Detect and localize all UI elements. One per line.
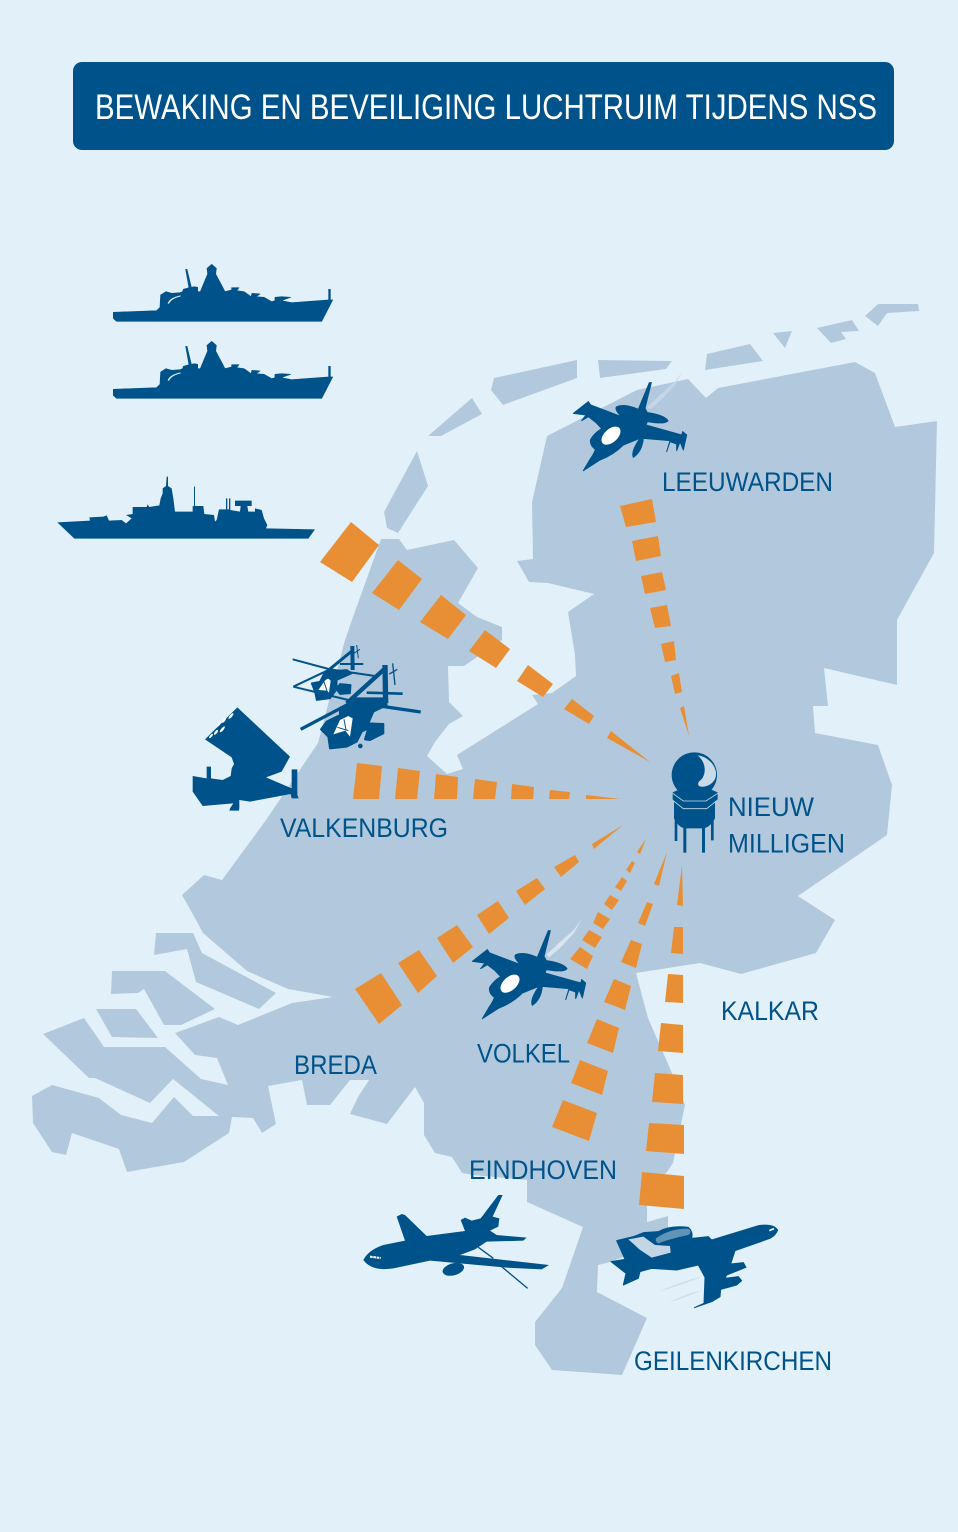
- island: Noord-Beveland: [96, 1009, 158, 1038]
- label: Geilenkirchen: GEILENKIRCHEN: [634, 1346, 832, 1376]
- orange signal ray: ships to Nieuw Milligen: [320, 522, 650, 762]
- icon: Patriot missile launcher: [193, 707, 299, 811]
- island: Schiermonnikoog: [705, 344, 763, 370]
- icon: Apache helicopter, front: [301, 663, 421, 748]
- island: Vlieland: [428, 398, 482, 436]
- island: Juist: [865, 304, 919, 326]
- orange signal ray: Leeuwarden: [620, 499, 689, 736]
- orange signal ray: Breda: [355, 825, 623, 1024]
- icon: F-16 fighter, Leeuwarden: [573, 370, 687, 471]
- mainland: [32, 362, 937, 1375]
- orange signal ray: Eindhoven: [552, 852, 667, 1141]
- label: Eindhoven: EINDHOVEN: [469, 1155, 617, 1185]
- label: Kalkar: KALKAR: [721, 996, 819, 1026]
- orange signal ray: Valkenburg: [353, 763, 620, 799]
- icon: KDC-10 tanker aircraft: [363, 1195, 549, 1288]
- island: Rottumeroog: [773, 331, 792, 348]
- orange signal ray: Kalkar and Geilenkirchen: [639, 865, 684, 1209]
- label: Nieuw Milligen: NIEUW: [728, 792, 814, 822]
- island: Terschelling: [491, 360, 577, 405]
- label: Valkenburg: VALKENBURG: [280, 813, 448, 843]
- icon: Apache helicopter, rear: [293, 645, 375, 700]
- icon: air defence frigate: [57, 477, 315, 539]
- island: Texel: [384, 451, 428, 533]
- icon: frigate 2: [113, 341, 333, 398]
- label: Breda: BREDA: [294, 1050, 377, 1080]
- icon: frigate 1: [113, 264, 333, 321]
- label: Nieuw Milligen: MILLIGEN: [728, 828, 845, 858]
- icon: F-16 fighter, Volkel: [472, 918, 586, 1019]
- label: Leeuwarden: LEEUWARDEN: [662, 467, 833, 497]
- island: Borkum: [817, 320, 859, 343]
- icon: AWACS radar aircraft: [611, 1225, 778, 1308]
- orange signal ray: Volkel: [570, 839, 646, 969]
- title banner: [73, 62, 894, 150]
- island: Goeree-Overflakkee: [154, 933, 276, 1009]
- island: Schouwen-Duiveland: [111, 971, 215, 1025]
- icon: radar dome, Nieuw Milligen: [672, 752, 718, 853]
- label: Volkel: VOLKEL: [477, 1038, 570, 1068]
- map of the Netherlands: [32, 304, 937, 1375]
- island: Ameland: [598, 360, 672, 378]
